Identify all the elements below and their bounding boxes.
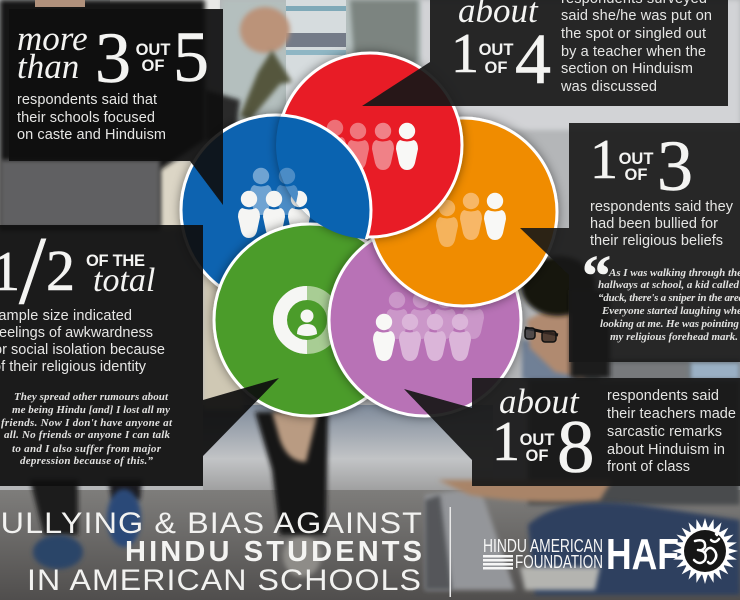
icon: red people group bbox=[324, 120, 418, 170]
stat: 1 out of 3: OUT bbox=[619, 150, 653, 168]
circle: blue overlap on red bbox=[276, 114, 372, 239]
panel: about 1 out of 8 bbox=[404, 378, 740, 489]
quote: rumours: all. No friends or anyone I can talk bbox=[4, 429, 170, 441]
stat: 1/2 of the total: 2 bbox=[46, 238, 75, 303]
quote: rumours: depression because of this.” bbox=[20, 455, 154, 467]
stat: more than 3 out of 5 bbox=[17, 17, 209, 98]
text: bullied for beliefs bbox=[590, 199, 734, 249]
stat: 1/2 of the total: total bbox=[93, 262, 155, 299]
logo: Hindu American Foundation: HINDU AMERICAN bbox=[483, 536, 603, 556]
text: bullied for beliefs: their religious beliefs bbox=[590, 233, 723, 249]
icon: orange people group bbox=[436, 193, 506, 247]
stat: about 1 out of 8: OF bbox=[526, 447, 548, 465]
quote: sniper story: As I was walking through the bbox=[608, 267, 740, 279]
stat: 1/2 of the total: / bbox=[19, 217, 46, 324]
stat: 1/2 of the total: OF THE bbox=[86, 252, 145, 270]
stat: 1 out of 3: 3 bbox=[657, 126, 693, 206]
logo: Hindu American Foundation bbox=[483, 518, 738, 584]
stat: about 1 out of 8: OUT bbox=[520, 431, 554, 449]
panel: 1 out of 3 bbox=[520, 123, 740, 362]
text: sarcastic remarks: respondents said bbox=[607, 388, 719, 404]
text: bullied for beliefs: had been bullied for bbox=[590, 216, 718, 232]
stat: 1/2 of the total bbox=[0, 217, 155, 324]
icon: logo stripes bbox=[483, 555, 513, 570]
text: sarcastic remarks: sarcastic remarks bbox=[607, 424, 722, 440]
text: schools focused on caste: their schools focused bbox=[17, 110, 155, 126]
circle: green bbox=[214, 224, 406, 416]
circle: red bbox=[278, 53, 462, 237]
text: schools focused on caste bbox=[17, 92, 166, 143]
stat: 1 out of 3: 1 bbox=[590, 129, 618, 191]
icon: sun with om bbox=[672, 518, 738, 584]
stat: more than 3 out of 5: OF bbox=[142, 57, 164, 75]
stat: 1 out of 3: OF bbox=[625, 166, 647, 184]
text: sarcastic remarks: about Hinduism in bbox=[607, 442, 725, 458]
logo: Hindu American Foundation: FOUNDATION bbox=[515, 552, 603, 572]
stat: more than 3 out of 5: OUT bbox=[136, 41, 170, 59]
text: sarcastic remarks bbox=[607, 388, 736, 475]
circle: purple bbox=[329, 224, 521, 416]
circle: orange bbox=[369, 118, 557, 306]
quote: sniper story: hallways at school, a kid called bbox=[598, 279, 740, 291]
stat: about 1 out of 4 bbox=[451, 0, 551, 99]
quote: rumours bbox=[1, 391, 173, 467]
quote: rumours: friends. Now I don't have anyone at bbox=[1, 417, 173, 429]
text: bullied for beliefs: respondents said they bbox=[590, 199, 734, 215]
stat: about 1 out of 8: 1 bbox=[492, 411, 520, 473]
circle: blue bbox=[181, 115, 371, 305]
panel: about 1 out of 4 bbox=[362, 0, 728, 106]
panel: more than 3 out of 5 bbox=[9, 9, 223, 205]
stat: more than 3 out of 5: 5 bbox=[173, 17, 209, 97]
text: singled out by a teacher bbox=[560, 0, 712, 95]
text: singled out by a teacher: said she/he was put on bbox=[561, 8, 712, 24]
text: singled out by a teacher: was discussed bbox=[560, 79, 657, 95]
stat: about 1 out of 4: OF bbox=[485, 59, 507, 77]
panel: 1/2 of the total bbox=[0, 217, 279, 486]
quote: rumours: They spread other rumours about bbox=[14, 391, 169, 403]
stat: more than 3 out of 5: 3 bbox=[95, 18, 131, 98]
icon: purple people group bbox=[373, 292, 484, 361]
stat: about 1 out of 8: 8 bbox=[557, 406, 594, 489]
stat: about 1 out of 4: 4 bbox=[515, 19, 551, 99]
text: singled out by a teacher: the spot or singled out bbox=[561, 26, 706, 42]
text: awkwardness and isolation bbox=[0, 308, 165, 375]
stat: more than 3 out of 5: more bbox=[17, 19, 88, 58]
text: singled out by a teacher: by a teacher when the bbox=[561, 44, 706, 60]
icon: green ring with person bbox=[280, 293, 334, 347]
stat: more than 3 out of 5: than bbox=[17, 47, 79, 86]
text: sarcastic remarks: their teachers made bbox=[607, 406, 736, 422]
title: IN AMERICAN SCHOOLS bbox=[27, 564, 422, 597]
stat: 1 out of 3 bbox=[590, 126, 693, 206]
logo: Hindu American Foundation: HAF bbox=[606, 530, 679, 579]
stat: about 1 out of 8: about bbox=[499, 382, 580, 421]
quote: rumours: to and I also suffer from major bbox=[12, 443, 162, 455]
text: schools focused on caste: on caste and Hinduism bbox=[17, 127, 166, 143]
title bbox=[0, 507, 423, 597]
quote: sniper story: my religious forehead mark. bbox=[610, 331, 738, 343]
icon: blue people group bbox=[238, 168, 310, 238]
stat: about 1 out of 4: OUT bbox=[479, 41, 513, 59]
stat: about 1 out of 8 bbox=[492, 382, 594, 489]
text: sarcastic remarks: front of class bbox=[607, 459, 690, 475]
quote: sniper story bbox=[598, 267, 740, 343]
text: singled out by a teacher: section on Hinduism bbox=[561, 61, 693, 77]
stat: about 1 out of 4: 1 bbox=[451, 23, 479, 85]
quote: rumours: me being Hindu [and] I lost all my bbox=[12, 404, 170, 416]
text: schools focused on caste: respondents said that bbox=[17, 92, 157, 108]
title: HINDU STUDENTS bbox=[125, 536, 422, 568]
panel: overlapping circles bbox=[181, 53, 557, 416]
icon: quotation mark: “ bbox=[582, 243, 611, 308]
